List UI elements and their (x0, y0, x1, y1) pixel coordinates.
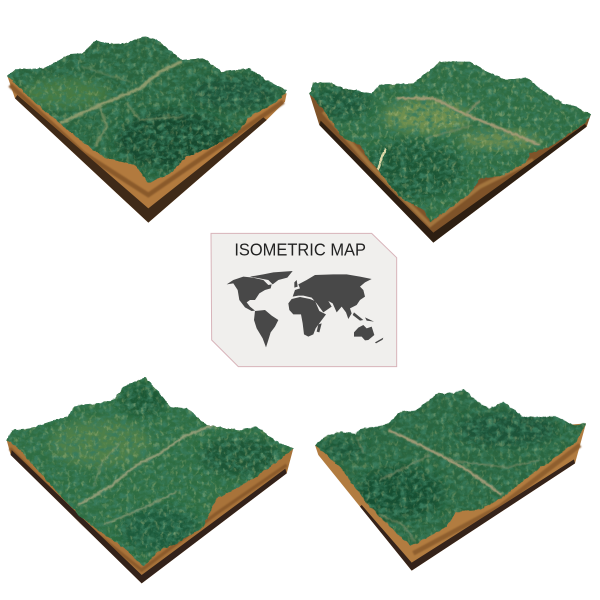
river valleys (78, 425, 213, 525)
terrain block: bottom left (0, 370, 300, 590)
south america (254, 310, 278, 347)
soil layers (7, 76, 287, 223)
soil layers (315, 423, 586, 571)
islands (317, 323, 322, 332)
info card: world map (211, 233, 397, 367)
landslide scar (377, 148, 386, 171)
terrain surface (308, 61, 592, 222)
north america (227, 277, 272, 311)
eurasia (293, 274, 372, 319)
terrain block: top right (308, 61, 592, 243)
card panel (211, 233, 397, 367)
river valleys (60, 62, 183, 147)
river valleys (397, 98, 540, 145)
title: ISOMETRIC MAP (234, 240, 366, 260)
terrain surface (315, 389, 586, 546)
river valleys (357, 430, 540, 542)
terrain surface (6, 377, 294, 566)
terrain block: top left (0, 30, 300, 223)
africa (288, 297, 326, 337)
terrain block: bottom right (315, 389, 586, 571)
terrain surface (7, 36, 287, 183)
world map silhouette (227, 271, 383, 347)
soil layers (7, 440, 293, 583)
canadian arctic and greenland (250, 271, 293, 284)
australia (354, 325, 374, 340)
soil layers (309, 93, 591, 243)
